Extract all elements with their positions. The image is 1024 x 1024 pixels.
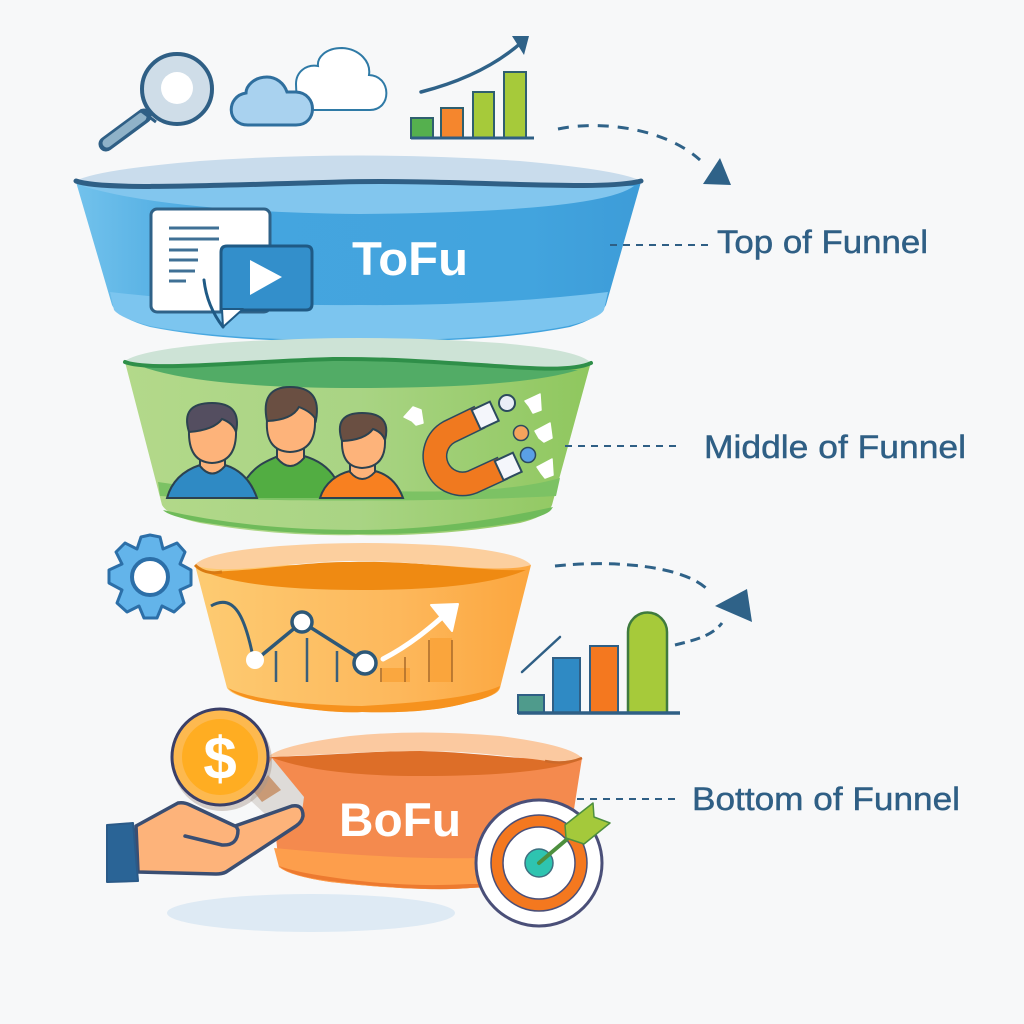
shadow — [167, 894, 455, 932]
icon: growth bar chart top — [411, 36, 534, 138]
icon: bar chart lower right — [518, 612, 680, 713]
icon: video speech bubble — [204, 246, 312, 327]
arrow: top dashed — [558, 126, 731, 185]
icon: document — [151, 209, 270, 312]
panel: BoFu funnel tier — [268, 732, 582, 889]
panel: ToFu funnel tier — [76, 156, 641, 341]
icon: person green — [247, 387, 338, 498]
chart in tier — [211, 602, 458, 682]
icon: person blue — [167, 403, 257, 498]
connector: bottom of funnel — [577, 798, 678, 800]
connector: middle of funnel — [565, 445, 680, 447]
panel: MoFu funnel tier — [125, 338, 591, 535]
icon: magnifying glass — [106, 54, 212, 144]
label: Bottom of Funnel: Bottom of Funnel — [692, 781, 960, 817]
cuff — [107, 823, 138, 882]
label: Top of Funnel: Top of Funnel — [717, 224, 928, 260]
coin shadow — [172, 711, 272, 811]
icon: gear — [109, 535, 191, 618]
hand — [136, 803, 303, 874]
icon: clouds — [231, 48, 386, 125]
label: Middle of Funnel: Middle of Funnel — [704, 429, 966, 465]
heading: ToFu: ToFu — [352, 232, 468, 285]
connector: top of funnel — [610, 244, 708, 246]
icon: magnet — [404, 394, 553, 484]
paper — [250, 758, 304, 814]
heading: BoFu: BoFu — [339, 793, 461, 846]
arrow: lower dashed — [555, 564, 752, 645]
icon: target with dart — [476, 800, 610, 926]
icon: hand holding coin — [107, 709, 304, 882]
icon: hand holding coin: $ — [203, 725, 237, 792]
panel: third funnel tier — [195, 543, 531, 712]
coin — [172, 709, 268, 805]
icon: person orange — [320, 413, 403, 498]
